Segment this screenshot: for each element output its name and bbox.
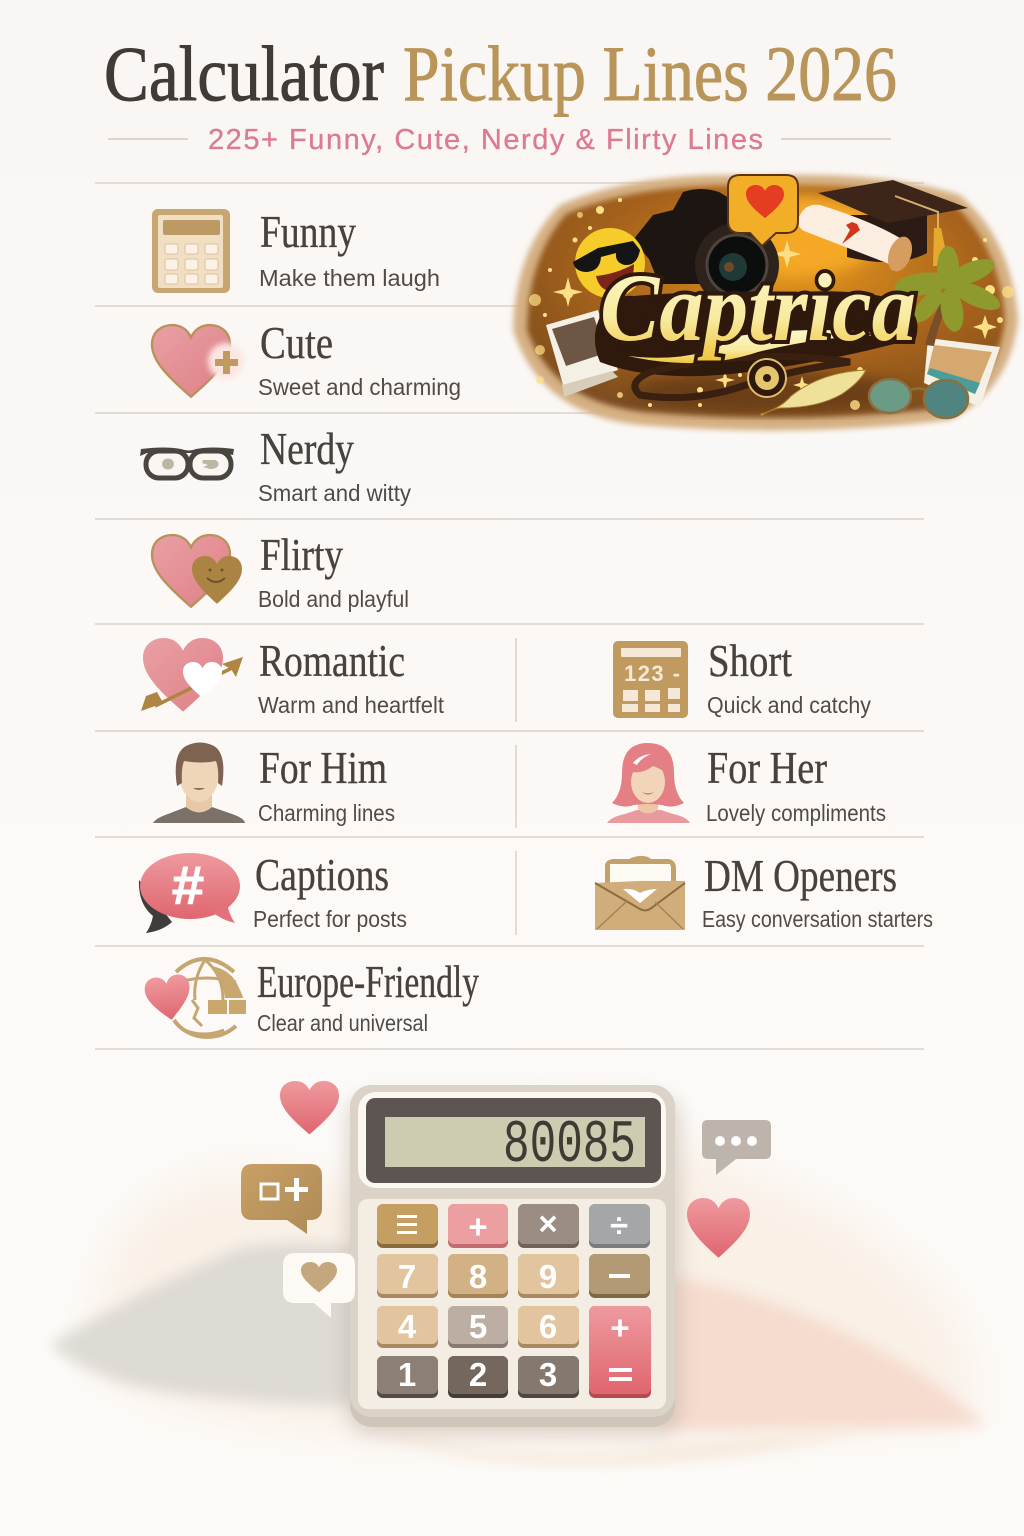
title: [104, 30, 897, 117]
row: Short: [613, 635, 871, 718]
heading: DM Openers: DM Openers: [704, 850, 897, 901]
logo plaque: [595, 291, 918, 376]
calculator keys: +: [468, 1208, 488, 1245]
graduation cap: [818, 180, 968, 266]
heading: Flirty: Flirty: [260, 529, 343, 580]
background hills: [50, 1131, 985, 1465]
description: Flirty: Bold and playful: [258, 586, 409, 612]
row: Europe-Friendly: [143, 956, 479, 1037]
calculator keys: ×: [538, 1205, 558, 1242]
heading: Romantic: Romantic: [259, 635, 405, 686]
aperture icon: [748, 359, 786, 397]
description: Europe-Friendly: Clear and universal: [257, 1010, 428, 1036]
icon: glasses: [140, 448, 234, 478]
icon: heart with smiling heart: [152, 535, 242, 607]
heading: Cute: Cute: [260, 317, 333, 368]
heading: For Him: For Him: [259, 742, 387, 793]
calculator keys: ÷: [610, 1207, 628, 1244]
icon: envelope: [595, 856, 685, 930]
white heart bubble: [283, 1253, 355, 1318]
icon: heart with arrow: [141, 638, 243, 712]
calculator keys: 8: [469, 1258, 487, 1295]
description: For Him: Charming lines: [258, 800, 395, 826]
row: Cute: [152, 317, 461, 400]
row: DM Openers: [595, 850, 933, 932]
icon: hashtag bubble: [139, 853, 240, 933]
calculator keys: 1: [398, 1356, 416, 1393]
icon: hashtag bubble: #: [171, 857, 205, 921]
camera: [633, 189, 779, 307]
title: Pickup Lines 2026: [403, 30, 897, 117]
description: For Her: Lovely compliments: [706, 800, 886, 826]
calculator keys: 9: [539, 1258, 557, 1295]
icon: number calculator: [613, 641, 688, 718]
calculator: [346, 1085, 681, 1435]
row: Nerdy: [140, 423, 411, 506]
grey chat bubble: [702, 1120, 771, 1175]
icon: calculator: [152, 209, 230, 293]
row: For Her: [607, 742, 886, 826]
calculator keys: 6: [539, 1308, 557, 1345]
badge: Captrica logo: [513, 175, 1018, 430]
description: Cute: Sweet and charming: [258, 374, 461, 400]
calculator keys: 2: [469, 1356, 487, 1393]
row: Funny: [152, 206, 440, 293]
feather: [761, 370, 866, 416]
heading: Europe-Friendly: Europe-Friendly: [257, 956, 479, 1007]
description: Funny: Make them laugh: [259, 265, 440, 291]
row: Romantic: [141, 635, 445, 718]
icon: number calculator: 123 -: [624, 661, 680, 686]
palm tree: [893, 246, 1004, 346]
description: Romantic: Warm and heartfelt: [258, 692, 445, 718]
icon: heart with plus: [152, 325, 244, 397]
icon: man: [153, 742, 245, 823]
calculator keys: [377, 1204, 651, 1398]
row: Captions: [139, 849, 407, 933]
calculator keys: +: [610, 1309, 630, 1346]
row: For Him: [153, 742, 395, 826]
sunglasses: [869, 379, 968, 418]
right photo: [924, 338, 1000, 407]
logo wordmark: Captrica: [600, 254, 916, 361]
calculator keys: 7: [398, 1258, 416, 1295]
floating heart right: [687, 1198, 750, 1258]
logo swoosh: [628, 330, 908, 398]
heading: For Her: For Her: [707, 742, 827, 793]
sparkles: [529, 198, 1014, 412]
icon: globe with heart: [143, 959, 246, 1037]
description: Nerdy: Smart and witty: [258, 480, 411, 506]
heading: Captions: Captions: [255, 849, 389, 900]
icon: woman: [607, 743, 690, 823]
calculator keys: 5: [469, 1308, 487, 1345]
calculator keys: 4: [398, 1308, 417, 1345]
subtitle: 225+ Funny, Cute, Nerdy & Flirty Lines: [208, 124, 763, 156]
heading: Nerdy: Nerdy: [260, 423, 354, 474]
calculator display: 80085: [503, 1112, 636, 1180]
calculator display: [366, 1098, 661, 1183]
calculator keys: 3: [539, 1356, 557, 1393]
row: Flirty: [152, 529, 409, 612]
gold plus bubble: [241, 1164, 322, 1234]
heading: Short: Short: [708, 635, 792, 686]
floating heart top left: [280, 1081, 339, 1134]
description: DM Openers: Easy conversation starters: [702, 906, 933, 932]
description: Captions: Perfect for posts: [253, 906, 407, 932]
scroll: [798, 205, 916, 275]
heading: Funny: Funny: [260, 206, 356, 257]
left photo: [546, 310, 618, 397]
heart speech bubble: [728, 175, 798, 246]
description: Short: Quick and catchy: [707, 692, 871, 718]
emoji with sunglasses: [573, 228, 645, 298]
title: Calculator: [104, 30, 384, 117]
